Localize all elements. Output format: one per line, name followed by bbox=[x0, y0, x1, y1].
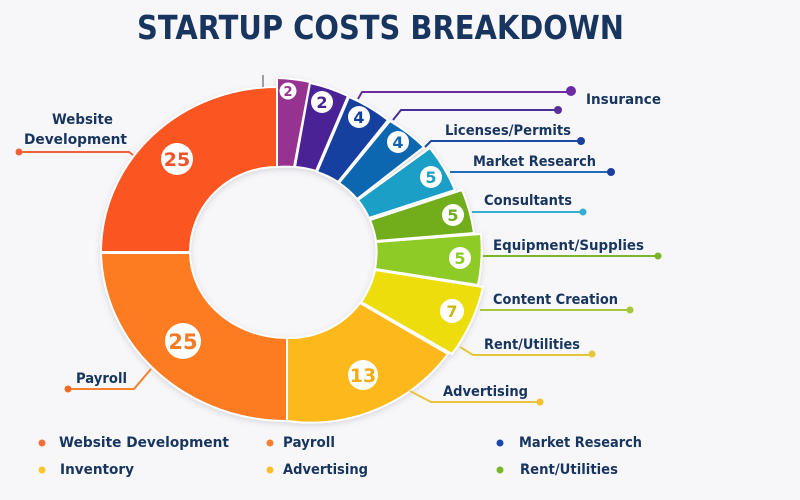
badge 25 bbox=[161, 143, 193, 175]
badge 2 bbox=[280, 82, 296, 100]
badge 25 bbox=[165, 323, 201, 359]
callout: consultants bbox=[472, 193, 586, 216]
callout: equipment/supplies: Equipment/Supplies bbox=[493, 238, 644, 254]
callout: payroll: Payroll bbox=[76, 371, 127, 387]
tick mark bbox=[262, 75, 264, 87]
slice: consultants bbox=[358, 148, 455, 218]
badge 4: 4 bbox=[353, 108, 365, 127]
slice: market research bbox=[339, 121, 424, 199]
callout: market research: Market Research bbox=[473, 154, 596, 170]
callout: advertising bbox=[410, 384, 544, 406]
donut chart bbox=[101, 78, 483, 423]
slice: rent/utilities bbox=[361, 270, 483, 354]
callout: consultants: Consultants bbox=[484, 193, 572, 209]
callout: website development: Development bbox=[24, 132, 127, 148]
callout: insurance: Insurance bbox=[586, 92, 661, 108]
slice: payroll bbox=[101, 253, 287, 421]
callout: licenses/permits: Licenses/Permits bbox=[445, 123, 571, 139]
badge 5: 5 bbox=[425, 168, 437, 187]
badge 4 bbox=[387, 131, 409, 153]
badge 5: 5 bbox=[454, 249, 466, 268]
badge 5 bbox=[449, 247, 471, 269]
badge 2 bbox=[311, 91, 333, 113]
badge 4: 4 bbox=[392, 133, 404, 152]
badge 13 bbox=[348, 360, 378, 390]
badge 7: 7 bbox=[446, 302, 458, 321]
slice: website development bbox=[101, 87, 277, 252]
callout: advertising: Advertising bbox=[443, 384, 528, 400]
callout: rent/utilities: Rent/Utilities bbox=[484, 337, 580, 353]
callout: content creation: Content Creation bbox=[493, 292, 618, 308]
badge 25: 25 bbox=[164, 149, 190, 171]
title: STARTUP COSTS BREAKDOWN bbox=[137, 8, 624, 47]
badge 5: 5 bbox=[447, 206, 459, 225]
slice: insurance bbox=[277, 78, 310, 167]
legend bbox=[38, 435, 642, 478]
badge 25: 25 bbox=[168, 330, 198, 354]
badge 13: 13 bbox=[350, 365, 376, 387]
slice: equipment/supplies bbox=[370, 190, 474, 241]
badge 7 bbox=[440, 299, 464, 323]
callout: insurance bbox=[358, 86, 661, 108]
slice: content creation bbox=[375, 234, 482, 285]
callout: market research bbox=[450, 154, 615, 176]
callout: equipment/supplies bbox=[483, 238, 662, 260]
callout: rent/utilities bbox=[460, 337, 596, 358]
badge 5 bbox=[442, 204, 464, 226]
slice: advertising bbox=[287, 303, 448, 423]
callout: website development bbox=[16, 112, 133, 156]
callout: payroll bbox=[64, 369, 151, 392]
badge 5 bbox=[420, 166, 442, 188]
callout: content creation bbox=[480, 292, 634, 314]
value badges bbox=[161, 82, 471, 390]
legend item: inventory: Inventory bbox=[60, 462, 135, 478]
slice: licenses/permits bbox=[317, 97, 388, 182]
legend item: payroll: Payroll bbox=[283, 435, 335, 451]
callout: licenses/permits bbox=[425, 123, 585, 147]
slice: indigo bbox=[295, 83, 348, 171]
legend item: market research: Market Research bbox=[519, 435, 642, 451]
legend item: advertising: Advertising bbox=[283, 462, 368, 478]
badge 2: 2 bbox=[316, 93, 328, 112]
badge 4 bbox=[348, 106, 370, 128]
legend item: website development: Website Development bbox=[59, 435, 229, 451]
callout: unlabelled leader bbox=[393, 106, 562, 120]
callout: website development: Website bbox=[52, 112, 113, 128]
badge 2: 2 bbox=[283, 85, 293, 100]
legend item: rent/utilities: Rent/Utilities bbox=[520, 462, 618, 478]
